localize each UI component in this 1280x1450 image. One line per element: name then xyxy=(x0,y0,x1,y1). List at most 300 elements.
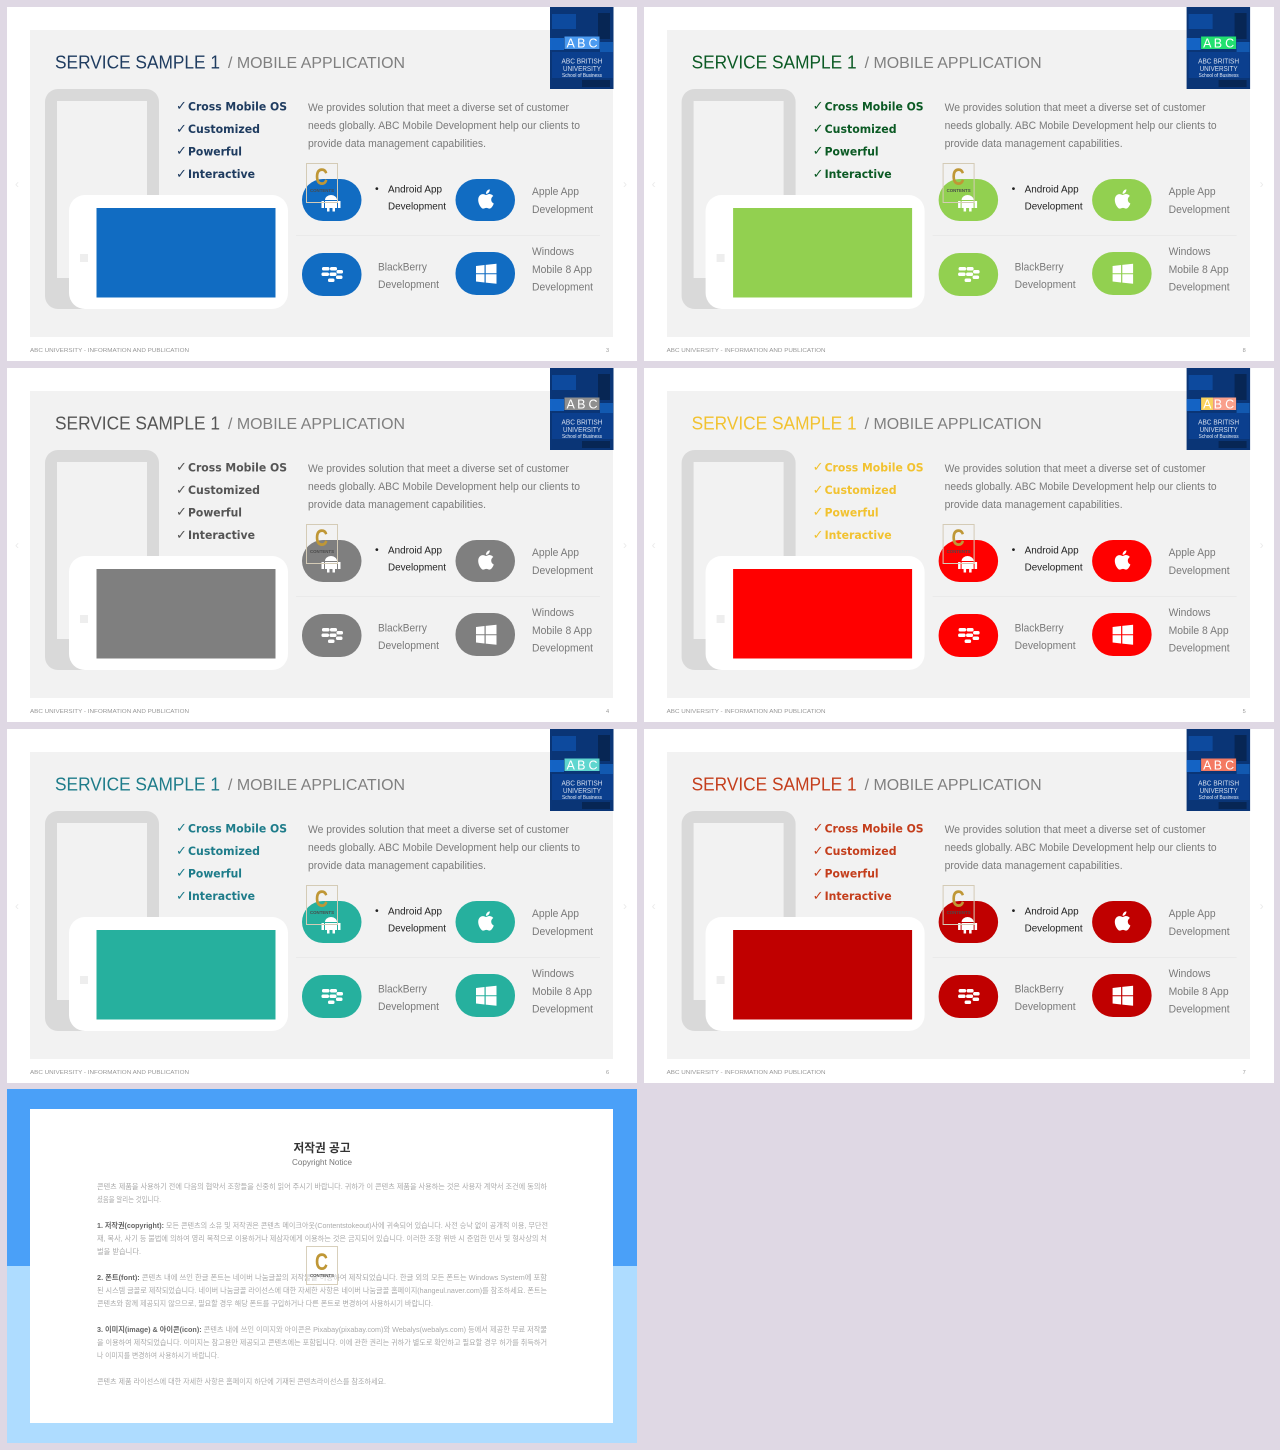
windows label xyxy=(1169,968,1230,1016)
feature checklist: Interactive xyxy=(825,528,892,542)
footer xyxy=(667,348,1246,354)
windows label: Development xyxy=(1169,1004,1230,1016)
feature checklist: Cross Mobile OS xyxy=(188,460,287,474)
feature checklist: ✓ xyxy=(176,844,187,859)
watermark xyxy=(943,886,974,924)
icon: apple xyxy=(456,540,515,582)
slide: grey: ‹ xyxy=(15,538,19,552)
slide: red and yellow: › xyxy=(1260,538,1264,552)
title: SERVICE SAMPLE 1 xyxy=(692,52,857,72)
logo: ABC BRITISH xyxy=(1198,778,1239,788)
apple label xyxy=(532,547,593,577)
windows label: Mobile 8 App xyxy=(532,625,592,637)
slide: dark red xyxy=(644,729,1274,1083)
apple label: Development xyxy=(532,204,593,216)
phone illustration xyxy=(45,450,288,670)
watermark: C xyxy=(315,525,328,552)
blackberry label: BlackBerry xyxy=(1015,984,1064,996)
windows label: Development xyxy=(532,282,593,294)
apple label: Development xyxy=(1169,926,1230,938)
feature checklist: Customized xyxy=(188,122,260,136)
description xyxy=(945,102,1217,150)
intro paragraph: 셨음을 알리는 것입니다. xyxy=(97,1195,161,1204)
blackberry label: Development xyxy=(1015,1001,1076,1013)
feature checklist: ✓ xyxy=(813,505,824,520)
logo: UNIVERSITY xyxy=(563,786,601,795)
watermark: C xyxy=(952,164,965,191)
android label xyxy=(375,544,446,574)
icon: blackberry xyxy=(939,975,998,1018)
logo: A B C xyxy=(566,758,598,772)
android label: Development xyxy=(1025,922,1083,934)
watermark: CONTENTS xyxy=(310,549,334,554)
description: We provides solution that meet a diverse set of customer xyxy=(945,463,1206,475)
feature checklist: Powerful xyxy=(188,144,242,158)
title: SERVICE SAMPLE 1 xyxy=(55,412,220,434)
icon: windows xyxy=(456,252,515,295)
feature checklist: Interactive xyxy=(825,167,892,181)
feature checklist: Cross Mobile OS xyxy=(188,822,287,836)
footer: 3 xyxy=(606,348,609,354)
description: We provides solution that meet a diverse set of customer xyxy=(308,463,569,475)
logo: A B C xyxy=(1203,758,1234,772)
section: copyright: 벌을 받습니다. xyxy=(97,1247,141,1256)
slide: green: ‹ xyxy=(652,177,656,191)
slide: grey xyxy=(7,368,637,722)
icon: blackberry xyxy=(302,253,362,296)
icon: apple xyxy=(456,901,515,943)
logo xyxy=(550,729,614,811)
apple label: Apple App xyxy=(532,908,579,920)
icon: apple xyxy=(1092,540,1152,582)
logo: UNIVERSITY xyxy=(563,64,601,73)
icon: windows xyxy=(456,613,515,656)
section: copyright: 재, 복사, 사기 등 불법에 의하여 영리 목적으로 이용하거나 제삼자에게 이용하는 것은 금지되어 있습니다. 이러한 조항 위반 시 준엄한 민사 및 형사상의 처 xyxy=(97,1234,547,1243)
android label: • xyxy=(1012,544,1016,556)
logo: ABC BRITISH xyxy=(562,56,602,66)
logo xyxy=(550,368,614,450)
watermark: C xyxy=(315,1249,328,1276)
logo: School of Business xyxy=(1199,73,1239,79)
icon: apple xyxy=(456,179,515,221)
description xyxy=(308,824,580,872)
logo: A B C xyxy=(566,36,598,50)
icon: blackberry xyxy=(939,253,998,296)
watermark xyxy=(306,1246,338,1284)
footer xyxy=(30,1070,609,1076)
blackberry label: Development xyxy=(378,279,439,291)
windows label xyxy=(1169,607,1230,654)
blackberry label xyxy=(1015,262,1076,291)
logo: A B C xyxy=(1203,398,1234,412)
feature checklist: Cross Mobile OS xyxy=(825,822,924,836)
android label: Development xyxy=(1025,562,1083,574)
logo: School of Business xyxy=(562,434,602,440)
description: provide data management capabilities. xyxy=(308,860,486,872)
blackberry label: BlackBerry xyxy=(1015,622,1064,634)
feature checklist: Interactive xyxy=(825,889,892,903)
title xyxy=(55,412,405,434)
apple label: Apple App xyxy=(1169,908,1216,920)
section: copyright: 1. 저작권(copyright): 모든 콘텐츠의 소유 및 저작권은 콘텐츠 메이크아웃(Contentstokeout)사에 귀속되어 있습니다. 사전 승낙 없이 공개적 이용, 무단전 xyxy=(97,1221,548,1230)
apple label: Development xyxy=(532,926,593,938)
windows label: Mobile 8 App xyxy=(1169,986,1229,998)
android label: Development xyxy=(388,922,446,934)
logo: UNIVERSITY xyxy=(1200,425,1238,434)
logo: UNIVERSITY xyxy=(563,425,601,434)
windows label: Windows xyxy=(532,968,574,980)
feature checklist: ✓ xyxy=(813,821,824,836)
windows label xyxy=(1169,246,1230,294)
feature checklist: Customized xyxy=(825,483,897,497)
license note: 콘텐츠 제품 라이선스에 대한 자세한 사항은 홈페이지 하단에 기재된 콘텐츠라이선스를 참조하세요. xyxy=(97,1377,386,1386)
logo xyxy=(1187,368,1250,450)
title xyxy=(55,774,405,794)
feature checklist: ✓ xyxy=(813,483,824,498)
windows label xyxy=(532,246,593,294)
slide: green xyxy=(644,7,1274,361)
description: provide data management capabilities. xyxy=(945,499,1123,511)
watermark xyxy=(306,886,338,924)
feature checklist: ✓ xyxy=(176,505,187,520)
feature checklist: ✓ xyxy=(813,460,824,475)
phone illustration xyxy=(45,89,288,309)
apple label: Apple App xyxy=(532,547,579,559)
title: / MOBILE APPLICATION xyxy=(865,416,1042,433)
slide: blue: › xyxy=(623,177,627,191)
blackberry label: Development xyxy=(378,640,439,652)
panel: copyright notice xyxy=(7,1089,637,1443)
feature checklist: ✓ xyxy=(813,528,824,543)
footer: 6 xyxy=(606,1070,609,1076)
copyright heading: Copyright Notice xyxy=(292,1158,353,1167)
apple label: Apple App xyxy=(532,186,579,198)
section: image and icon: 3. 이미지(image) & 아이콘(icon): 콘텐츠 내에 쓰인 이미지와 아이콘은 Pixabay(pixabay.com)와 Webalys(webalys.com) 등에서 제공한 무료 저작물 xyxy=(97,1325,547,1334)
windows label: Windows xyxy=(532,607,574,619)
android label: Development xyxy=(388,200,446,212)
description: We provides solution that meet a diverse set of customer xyxy=(308,102,569,114)
feature checklist xyxy=(813,460,924,543)
feature checklist: ✓ xyxy=(176,483,187,498)
section: copyright xyxy=(97,1221,548,1256)
windows label: Windows xyxy=(1169,968,1211,980)
logo: School of Business xyxy=(1199,795,1239,801)
slide: dark red: ‹ xyxy=(652,899,656,913)
slide: grey: › xyxy=(623,538,627,552)
feature checklist xyxy=(813,99,924,182)
icon: windows xyxy=(1092,974,1152,1017)
title: / MOBILE APPLICATION xyxy=(865,777,1042,794)
logo: School of Business xyxy=(1199,434,1239,440)
icon: android xyxy=(939,901,998,943)
apple label xyxy=(532,908,593,938)
android label: Android App xyxy=(388,906,442,918)
feature checklist: ✓ xyxy=(813,144,824,159)
watermark xyxy=(943,164,974,202)
feature checklist: Powerful xyxy=(825,866,879,880)
feature checklist: Powerful xyxy=(825,506,879,520)
icon: windows xyxy=(456,974,515,1017)
phone illustration xyxy=(45,811,288,1031)
feature checklist: Cross Mobile OS xyxy=(825,460,924,474)
android label: • xyxy=(1012,905,1016,917)
watermark: CONTENTS xyxy=(947,549,971,554)
apple label: Apple App xyxy=(1169,547,1216,559)
watermark: C xyxy=(952,525,965,552)
windows label xyxy=(532,968,593,1016)
feature checklist: Customized xyxy=(825,844,897,858)
android label: Android App xyxy=(1025,544,1079,556)
title xyxy=(692,774,1042,794)
feature checklist xyxy=(176,821,287,904)
windows label: Development xyxy=(1169,642,1230,654)
description: We provides solution that meet a diverse set of customer xyxy=(945,824,1206,836)
logo xyxy=(550,7,614,89)
description: We provides solution that meet a diverse set of customer xyxy=(945,102,1206,114)
footer: ABC UNIVERSITY - INFORMATION AND PUBLICATION xyxy=(30,348,189,354)
android label: Android App xyxy=(1025,906,1079,918)
windows label xyxy=(532,607,593,654)
feature checklist: Cross Mobile OS xyxy=(825,100,924,114)
android label xyxy=(1012,544,1083,574)
watermark: CONTENTS xyxy=(310,910,334,915)
apple label: Development xyxy=(1169,204,1230,216)
feature checklist: Powerful xyxy=(188,506,242,520)
icon: windows xyxy=(1092,252,1152,295)
title xyxy=(692,412,1042,434)
footer: ABC UNIVERSITY - INFORMATION AND PUBLICATION xyxy=(667,1070,826,1076)
logo: A B C xyxy=(566,398,598,412)
slide: blue: ‹ xyxy=(15,177,19,191)
android label: • xyxy=(375,183,379,195)
blackberry label: BlackBerry xyxy=(378,262,427,274)
description: needs globally. ABC Mobile Development help our clients to xyxy=(945,120,1217,132)
apple label xyxy=(1169,186,1230,216)
feature checklist: Powerful xyxy=(188,866,242,880)
icon: blackberry xyxy=(302,614,362,657)
icon: apple xyxy=(1092,901,1152,943)
section: image and icon: 나 이미지를 변경하여 사용하시기 바랍니다. xyxy=(97,1351,219,1360)
apple label xyxy=(532,186,593,216)
windows label: Development xyxy=(1169,282,1230,294)
footer xyxy=(30,709,609,715)
title: SERVICE SAMPLE 1 xyxy=(692,412,857,434)
slide: teal xyxy=(7,729,637,1083)
slide: dark red: › xyxy=(1260,899,1264,913)
phone illustration xyxy=(682,89,925,309)
description: needs globally. ABC Mobile Development help our clients to xyxy=(308,842,580,854)
feature checklist: ✓ xyxy=(176,821,187,836)
apple label: Development xyxy=(532,565,593,577)
blackberry label xyxy=(1015,984,1076,1013)
description xyxy=(945,463,1217,511)
logo: ABC BRITISH xyxy=(1198,56,1239,66)
description: provide data management capabilities. xyxy=(945,138,1123,150)
slide: green: › xyxy=(1260,177,1264,191)
title: / MOBILE APPLICATION xyxy=(228,55,405,72)
logo xyxy=(1187,7,1250,89)
feature checklist: Customized xyxy=(188,483,260,497)
footer: ABC UNIVERSITY - INFORMATION AND PUBLICATION xyxy=(667,709,826,715)
description: provide data management capabilities. xyxy=(308,499,486,511)
watermark: CONTENTS xyxy=(947,910,971,915)
windows label: Mobile 8 App xyxy=(532,986,592,998)
feature checklist: Interactive xyxy=(188,528,255,542)
footer xyxy=(667,1070,1246,1076)
slide: red and yellow: ‹ xyxy=(652,538,656,552)
logo: ABC BRITISH xyxy=(562,418,602,426)
feature checklist: Interactive xyxy=(188,167,255,181)
icon: android xyxy=(939,179,998,221)
windows label: Mobile 8 App xyxy=(532,264,592,276)
intro paragraph xyxy=(97,1182,547,1204)
watermark: C xyxy=(315,886,328,913)
blackberry label xyxy=(378,262,439,291)
blackberry label: Development xyxy=(1015,640,1076,652)
icon: windows xyxy=(1092,613,1152,656)
slide: blue xyxy=(7,7,637,361)
description xyxy=(945,824,1217,872)
watermark xyxy=(306,164,338,202)
title xyxy=(55,52,405,72)
title: SERVICE SAMPLE 1 xyxy=(692,774,857,794)
icon: blackberry xyxy=(302,975,362,1018)
windows label: Mobile 8 App xyxy=(1169,264,1229,276)
description: We provides solution that meet a diverse set of customer xyxy=(308,824,569,836)
android label: Android App xyxy=(1025,184,1079,196)
watermark: C xyxy=(315,164,328,191)
apple label xyxy=(1169,547,1230,577)
description: needs globally. ABC Mobile Development help our clients to xyxy=(945,842,1217,854)
blackberry label xyxy=(378,984,439,1013)
apple label: Development xyxy=(1169,565,1230,577)
feature checklist xyxy=(176,460,287,543)
logo: ABC BRITISH xyxy=(562,778,602,788)
slide: teal: ‹ xyxy=(15,899,19,913)
android label: • xyxy=(375,905,379,917)
description: needs globally. ABC Mobile Development help our clients to xyxy=(945,481,1217,493)
description xyxy=(308,102,580,150)
slide: red and yellow xyxy=(644,368,1274,722)
footer: ABC UNIVERSITY - INFORMATION AND PUBLICATION xyxy=(30,1070,189,1076)
blackberry label: BlackBerry xyxy=(378,622,427,634)
android label: Android App xyxy=(388,184,442,196)
android label: Development xyxy=(1025,200,1083,212)
copyright heading: 저작권 공고 xyxy=(294,1140,350,1155)
feature checklist: ✓ xyxy=(176,99,187,114)
copyright heading xyxy=(292,1140,353,1167)
icon: apple xyxy=(1092,179,1152,221)
section: font: 된 시스템 글꼴로 제작되었습니다. 네이버 나눔글꼴 라이선스에 대한 자세한 사항은 네이버 나눔글꼴 홈페이지(hangeul.naver.com)를 참조하세요. 폰트는 xyxy=(97,1286,547,1295)
feature checklist xyxy=(813,821,924,904)
feature checklist: ✓ xyxy=(813,866,824,881)
title: / MOBILE APPLICATION xyxy=(228,416,405,433)
footer: 5 xyxy=(1243,709,1246,715)
section: font: 2. 폰트(font): 콘텐츠 내에 쓰인 한글 폰트는 네이버 나눔글꼴의 저작물을 이용하여 제작되었습니다. 한글 외의 모든 폰트는 Windows System에 포함 xyxy=(97,1273,547,1282)
blackberry label: Development xyxy=(378,1001,439,1013)
feature checklist: Cross Mobile OS xyxy=(188,100,287,114)
watermark: CONTENTS xyxy=(310,1273,334,1278)
description: provide data management capabilities. xyxy=(945,860,1123,872)
footer: 4 xyxy=(606,709,609,715)
icon: blackberry xyxy=(939,614,998,657)
feature checklist: ✓ xyxy=(176,889,187,904)
phone illustration xyxy=(682,811,925,1031)
description: needs globally. ABC Mobile Development help our clients to xyxy=(308,120,580,132)
windows label: Mobile 8 App xyxy=(1169,625,1229,637)
watermark: CONTENTS xyxy=(947,188,971,193)
footer: ABC UNIVERSITY - INFORMATION AND PUBLICATION xyxy=(30,709,189,715)
feature checklist: ✓ xyxy=(176,144,187,159)
title: SERVICE SAMPLE 1 xyxy=(55,774,220,794)
icon: android xyxy=(939,540,998,582)
blackberry label xyxy=(1015,622,1076,652)
footer xyxy=(30,348,609,354)
phone illustration xyxy=(682,450,925,670)
logo: UNIVERSITY xyxy=(1200,64,1238,73)
windows label: Windows xyxy=(1169,607,1211,619)
footer: ABC UNIVERSITY - INFORMATION AND PUBLICATION xyxy=(667,348,826,354)
feature checklist: Powerful xyxy=(825,144,879,158)
watermark: CONTENTS xyxy=(310,188,334,193)
android label xyxy=(375,183,446,212)
title xyxy=(692,52,1042,72)
feature checklist: ✓ xyxy=(176,167,187,182)
feature checklist xyxy=(176,99,287,182)
feature checklist: Interactive xyxy=(188,889,255,903)
section: image and icon: 을 이용하여 제작되었습니다. 이미지는 참고용만 제공되고 콘텐츠에는 포함됩니다. 이에 관한 권리는 귀하가 별도로 확인하고 필요할 경우 허가를 취득하거 xyxy=(97,1338,547,1347)
description: provide data management capabilities. xyxy=(308,138,486,150)
slide: teal: › xyxy=(623,899,627,913)
feature checklist: ✓ xyxy=(176,866,187,881)
feature checklist: ✓ xyxy=(176,460,187,475)
feature checklist: ✓ xyxy=(176,122,187,137)
apple label: Apple App xyxy=(1169,186,1216,198)
feature checklist: ✓ xyxy=(813,167,824,182)
logo: UNIVERSITY xyxy=(1200,786,1238,795)
watermark: C xyxy=(952,886,965,913)
android label: • xyxy=(1012,183,1016,195)
footer xyxy=(667,709,1246,715)
footer: 8 xyxy=(1243,348,1246,354)
feature checklist: ✓ xyxy=(813,889,824,904)
description: needs globally. ABC Mobile Development help our clients to xyxy=(308,481,580,493)
windows label: Development xyxy=(532,642,593,654)
watermark xyxy=(943,524,974,564)
feature checklist: ✓ xyxy=(176,528,187,543)
android label xyxy=(1012,905,1083,934)
section: font: 콘텐츠와 함께 제공되지 않으므로, 필요할 경우 해당 폰트를 구입하거나 다른 폰트로 변경하여 사용하시기 바랍니다. xyxy=(97,1299,433,1308)
intro paragraph: 콘텐츠 제품을 사용하기 전에 다음의 협약서 조항들을 신중히 읽어 주시기 바랍니다. 귀하가 이 콘텐츠 제품을 사용하는 것은 사용자 계약서 조건에 동의하 xyxy=(97,1182,547,1191)
blackberry label xyxy=(378,622,439,652)
apple label xyxy=(1169,908,1230,938)
feature checklist: ✓ xyxy=(813,844,824,859)
feature checklist: ✓ xyxy=(813,122,824,137)
icon: android xyxy=(302,540,362,582)
logo: School of Business xyxy=(562,73,602,79)
icon: android xyxy=(302,179,362,221)
icon: android xyxy=(302,901,362,943)
feature checklist: Customized xyxy=(188,844,260,858)
blackberry label: Development xyxy=(1015,279,1076,291)
logo: School of Business xyxy=(562,795,602,801)
description xyxy=(308,463,580,511)
watermark xyxy=(306,524,338,564)
android label xyxy=(1012,183,1083,212)
title: SERVICE SAMPLE 1 xyxy=(55,52,220,72)
logo: A B C xyxy=(1203,36,1234,50)
logo: ABC BRITISH xyxy=(1198,418,1239,426)
